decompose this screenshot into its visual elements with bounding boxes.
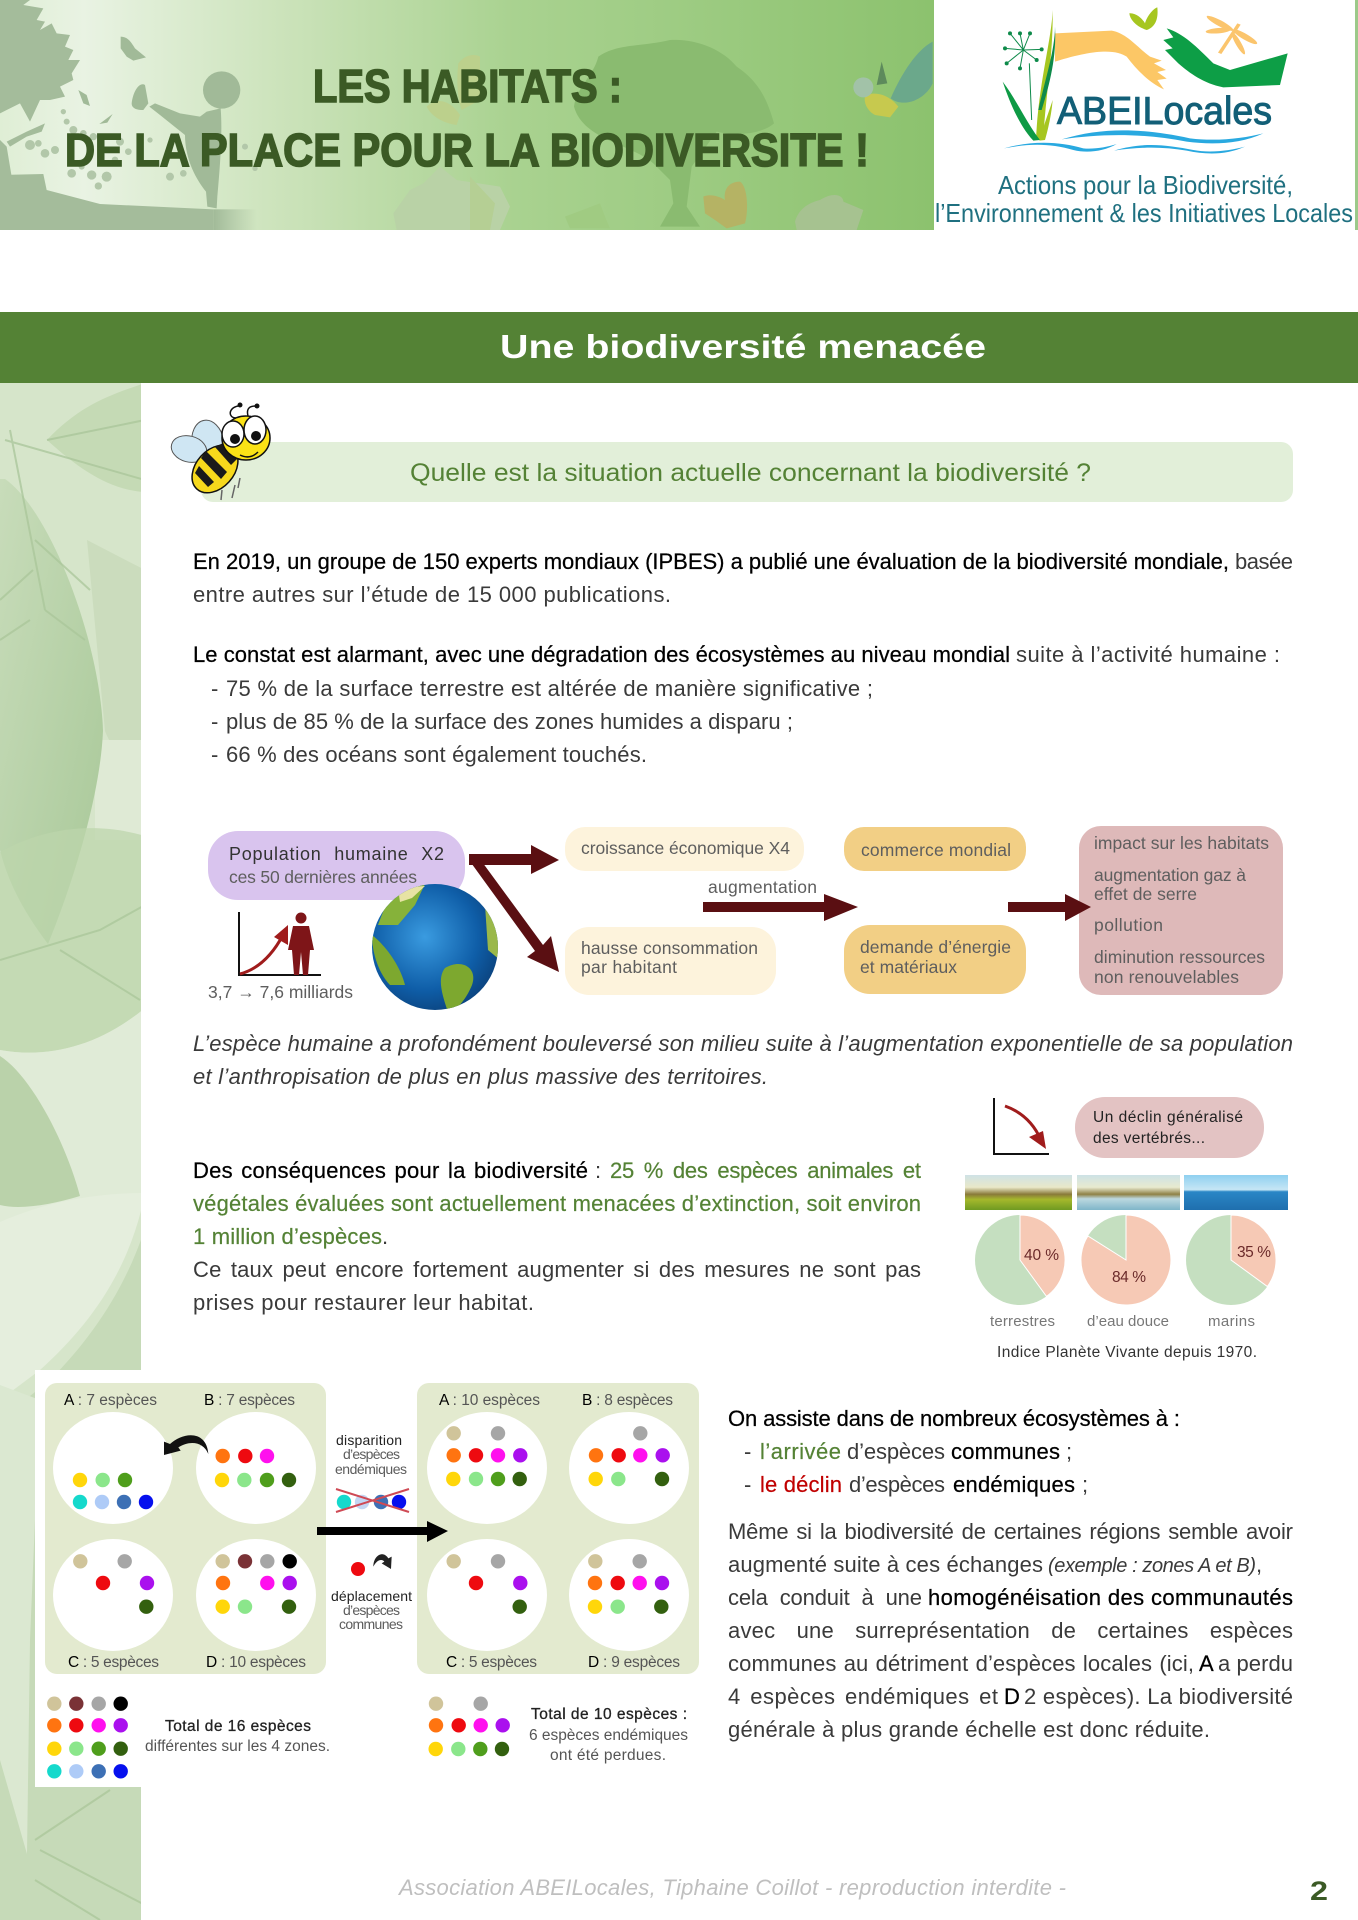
zone C species after (446, 1554, 528, 1614)
panel: after (417, 1383, 699, 1674)
icon: population growth chart (239, 912, 321, 975)
page number: 2 (1310, 1876, 1328, 1906)
species homogenisation diagram (35, 1370, 700, 1787)
impacts box: effet de serre (1094, 884, 1197, 904)
text block: ecosystems list: communes (951, 1439, 1060, 1464)
arrows from population (469, 845, 559, 972)
augmentation arrow: augmentation (708, 877, 817, 897)
total 10 species (529, 1706, 688, 1764)
panel: after: D : 9 espèces (588, 1654, 680, 1671)
text block: alarming findings list: 66 % des océans sont également touchés. (226, 742, 647, 767)
text block: homogenisation: , (1256, 1552, 1262, 1577)
zone A species after (446, 1426, 528, 1486)
text block: alarming findings list: suite à l’activité humaine : (1016, 642, 1280, 667)
text block: homogenisation: cela conduit à une (728, 1585, 922, 1610)
header banner (0, 0, 934, 230)
text block: consequences: 1 million d’espèces (193, 1224, 382, 1249)
pie labels: d’eau douce (1087, 1313, 1169, 1330)
decline pill: Un déclin généralisé (1093, 1109, 1243, 1126)
icon: decline graph (994, 1098, 1049, 1154)
pie labels (990, 1313, 1255, 1330)
text block: homogenisation: 4 espèces endémiques et (728, 1684, 998, 1709)
text block: homogenisation: augmenté suite à ces échanges (728, 1552, 1043, 1577)
panel: before (45, 1383, 326, 1674)
pie: marins 35 %: 35 % (1237, 1244, 1271, 1261)
augmentation arrow (703, 877, 858, 921)
logo: ABEILocales (1057, 90, 1272, 133)
text block: IPBES evaluation: basée (1235, 549, 1293, 574)
panel: after: B : 8 espèces (582, 1392, 673, 1409)
text block: consequences: Des conséquences pour la biodiversité (193, 1158, 588, 1183)
text block: homogenisation: communes au détriment d’espèces locales (ici, (728, 1651, 1194, 1676)
text block: ecosystems list: d’espèces (847, 1439, 945, 1464)
pill: hausse consommation: par habitant (581, 957, 677, 977)
flow diagram: human pressures (208, 826, 1283, 1012)
footer credit: Association ABEILocales, Tiphaine Coillot - reproduction interdite - (397, 1875, 1066, 1900)
extinction note: disparition (336, 1432, 402, 1448)
pill: commerce mondial: commerce mondial (861, 840, 1011, 860)
text block: consequences: : (595, 1158, 601, 1183)
text block: homogenisation: (exemple : zones A et B) (1048, 1555, 1256, 1577)
extinction note: endémiques (335, 1461, 407, 1477)
pie: eau douce 84 % (1081, 1215, 1171, 1305)
pie: marins 35 % (1186, 1215, 1276, 1305)
text block: homogenisation: avec une surreprésentation de certaines espèces (728, 1618, 1293, 1643)
text block: homogenisation: 2 espèces). La biodiversité (1024, 1684, 1293, 1709)
population pill (208, 831, 465, 900)
text block: consequences (193, 1158, 921, 1315)
pill: croissance économique: croissance économique X4 (581, 838, 790, 858)
extinction note: d’espèces (343, 1446, 400, 1462)
text block: IPBES evaluation: En 2019, un groupe de 150 experts mondiaux (IPBES) a publié une évaluation de la biodiversité mondiale, (193, 549, 1229, 574)
text block: homogenisation: générale à plus grande échelle est donc réduite. (728, 1717, 1210, 1742)
italic paragraph: L’espèce humaine a profondément bouleversé son milieu suite à l’augmentation exponentielle de sa population (193, 1031, 1293, 1056)
text block: homogenisation: D (1004, 1684, 1020, 1709)
population pill: Population humaine X2 (229, 844, 444, 864)
text block: ecosystems list: On assiste dans de nombreux écosystèmes à : (728, 1406, 1180, 1431)
legend before (47, 1696, 128, 1779)
text block: consequences: Ce taux peut encore fortement augmenter si des mesures ne sont pas (193, 1257, 921, 1282)
section heading bar (0, 312, 1358, 383)
text block: consequences: végétales évaluées sont actuellement menacées d’extinction, soit environ (193, 1191, 921, 1216)
displacement note: communes (339, 1616, 403, 1632)
text block: homogenisation: Même si la biodiversité de certaines régions semble avoir (728, 1519, 1293, 1544)
panel: before: B : 7 espèces (204, 1392, 295, 1409)
italic paragraph (193, 1031, 1293, 1089)
banner tree and animals (470, 40, 933, 230)
arrow to impacts (1008, 894, 1091, 921)
zone C species (73, 1554, 154, 1614)
impacts box: non renouvelables (1094, 967, 1239, 987)
impacts box: diminution ressources (1094, 947, 1265, 967)
text block: consequences: prises pour restaurer leur habitat. (193, 1290, 534, 1315)
logo drawing: hands, butterfly, dragonfly, plant, water (1003, 7, 1288, 154)
population pill: ces 50 dernières années (229, 867, 417, 887)
displacement note: d’espèces (343, 1602, 400, 1618)
section heading bar: Une biodiversité menacée (500, 328, 986, 365)
panel: before: C : 5 espèces (68, 1654, 159, 1671)
pie: terrestres 40 % (975, 1215, 1065, 1305)
logo (934, 0, 1358, 230)
text block: alarming findings list (193, 642, 1280, 767)
banner title: DE LA PLACE POUR LA BIODIVERSITE ! (65, 124, 869, 176)
impacts box: impact sur les habitats (1094, 833, 1269, 853)
pie labels: terrestres (990, 1313, 1055, 1330)
pill: hausse consommation: hausse consommation (581, 938, 758, 958)
text block: ecosystems list: l’arrivée (760, 1439, 841, 1464)
text block: alarming findings list: plus de 85 % de la surface des zones humides a disparu ; (226, 709, 793, 734)
text block: ecosystems list: ; (1082, 1472, 1088, 1497)
text block: homogenisation: homogénéisation des communautés (928, 1585, 1293, 1610)
displacement note: déplacement (331, 1588, 412, 1604)
text block: consequences: 25 % des espèces animales et (610, 1158, 921, 1183)
text block: homogenisation (728, 1519, 1293, 1742)
text block: ecosystems list: endémiques (953, 1472, 1075, 1497)
text block: ecosystems list (728, 1406, 1180, 1497)
banner title: LES HABITATS : (313, 60, 622, 112)
decline pill (1075, 1097, 1264, 1158)
pie: eau douce 84 %: 84 % (1112, 1269, 1146, 1286)
text block: IPBES evaluation (193, 549, 1293, 607)
population numbers: 3,7 → 7,6 milliards (208, 982, 353, 1002)
text block: alarming findings list: 75 % de la surface terrestre est altérée de manière significative ; (226, 676, 873, 701)
big arrow before to after (317, 1521, 448, 1542)
impacts box: pollution (1094, 915, 1163, 935)
pie: terrestres 40 %: 40 % (1024, 1247, 1059, 1264)
total 16 species (145, 1718, 330, 1755)
total 10 species: Total de 10 espèces : (531, 1706, 687, 1723)
text block: alarming findings list: - (211, 676, 218, 701)
pill: demande d'énergie: et matériaux (860, 957, 957, 977)
extinction note (335, 1432, 409, 1512)
zone D species (216, 1554, 297, 1614)
text block: IPBES evaluation: entre autres sur l’étude de 15 000 publications. (193, 582, 671, 607)
pill: demande d'énergie: demande d’énergie (860, 937, 1011, 957)
banner silhouettes: tree, child, butterflies, ground (0, 0, 510, 230)
text block: ecosystems list: ; (1066, 1439, 1072, 1464)
impacts box: augmentation gaz à (1094, 865, 1246, 885)
total 16 species: différentes sur les 4 zones. (145, 1738, 330, 1755)
pill: demande d'énergie (844, 925, 1026, 994)
vertebrate decline chart (965, 1097, 1288, 1361)
total 10 species: 6 espèces endémiques (529, 1727, 688, 1744)
pie labels: marins (1208, 1313, 1255, 1330)
bee icon (168, 402, 270, 502)
text block: alarming findings list: Le constat est alarmant, avec une dégradation des écosystèmes au niveau mondial (193, 642, 1010, 667)
text block: ecosystems list: - (744, 1472, 751, 1497)
curved arrow B to A (164, 1435, 208, 1455)
pill: commerce mondial (844, 827, 1026, 871)
question callout: Quelle est la situation actuelle concernant la biodiversité ? (410, 459, 1091, 487)
landscape images (965, 1175, 1288, 1210)
zone D species after (588, 1554, 669, 1614)
total 16 species: Total de 16 espèces (165, 1718, 311, 1735)
banner title (65, 60, 869, 176)
pill: croissance économique (565, 827, 804, 871)
text block: ecosystems list: - (744, 1439, 751, 1464)
panel: after: C : 5 espèces (446, 1654, 537, 1671)
question callout (201, 442, 1293, 502)
panel: after: A : 10 espèces (439, 1392, 540, 1409)
total 10 species: ont été perdues. (550, 1747, 666, 1764)
left leaf strip (0, 383, 145, 1920)
chart caption: Indice Planète Vivante depuis 1970. (997, 1344, 1257, 1361)
displacement note (331, 1554, 412, 1632)
impacts box (1079, 826, 1283, 995)
logo: Actions pour la Biodiversité, (998, 170, 1293, 200)
text block: ecosystems list: le déclin (760, 1472, 842, 1497)
legend after (428, 1696, 510, 1756)
text block: ecosystems list: d’espèces (849, 1472, 945, 1497)
pill: hausse consommation (565, 927, 776, 995)
zone B species (215, 1449, 296, 1487)
text block: alarming findings list: - (211, 709, 218, 734)
italic paragraph: et l’anthropisation de plus en plus massive des territoires. (193, 1064, 768, 1089)
text block: alarming findings list: - (211, 742, 218, 767)
decline pill: des vertébrés... (1093, 1130, 1205, 1147)
zone A species (73, 1473, 153, 1509)
text block: homogenisation: a perdu (1218, 1651, 1293, 1676)
panel: before: A : 7 espèces (64, 1392, 157, 1409)
text block: consequences: . (382, 1224, 388, 1249)
text block: homogenisation: A (1199, 1651, 1214, 1676)
zone B species after (588, 1426, 670, 1486)
panel: before: D : 10 espèces (206, 1654, 306, 1671)
icon: globe (372, 884, 500, 1012)
